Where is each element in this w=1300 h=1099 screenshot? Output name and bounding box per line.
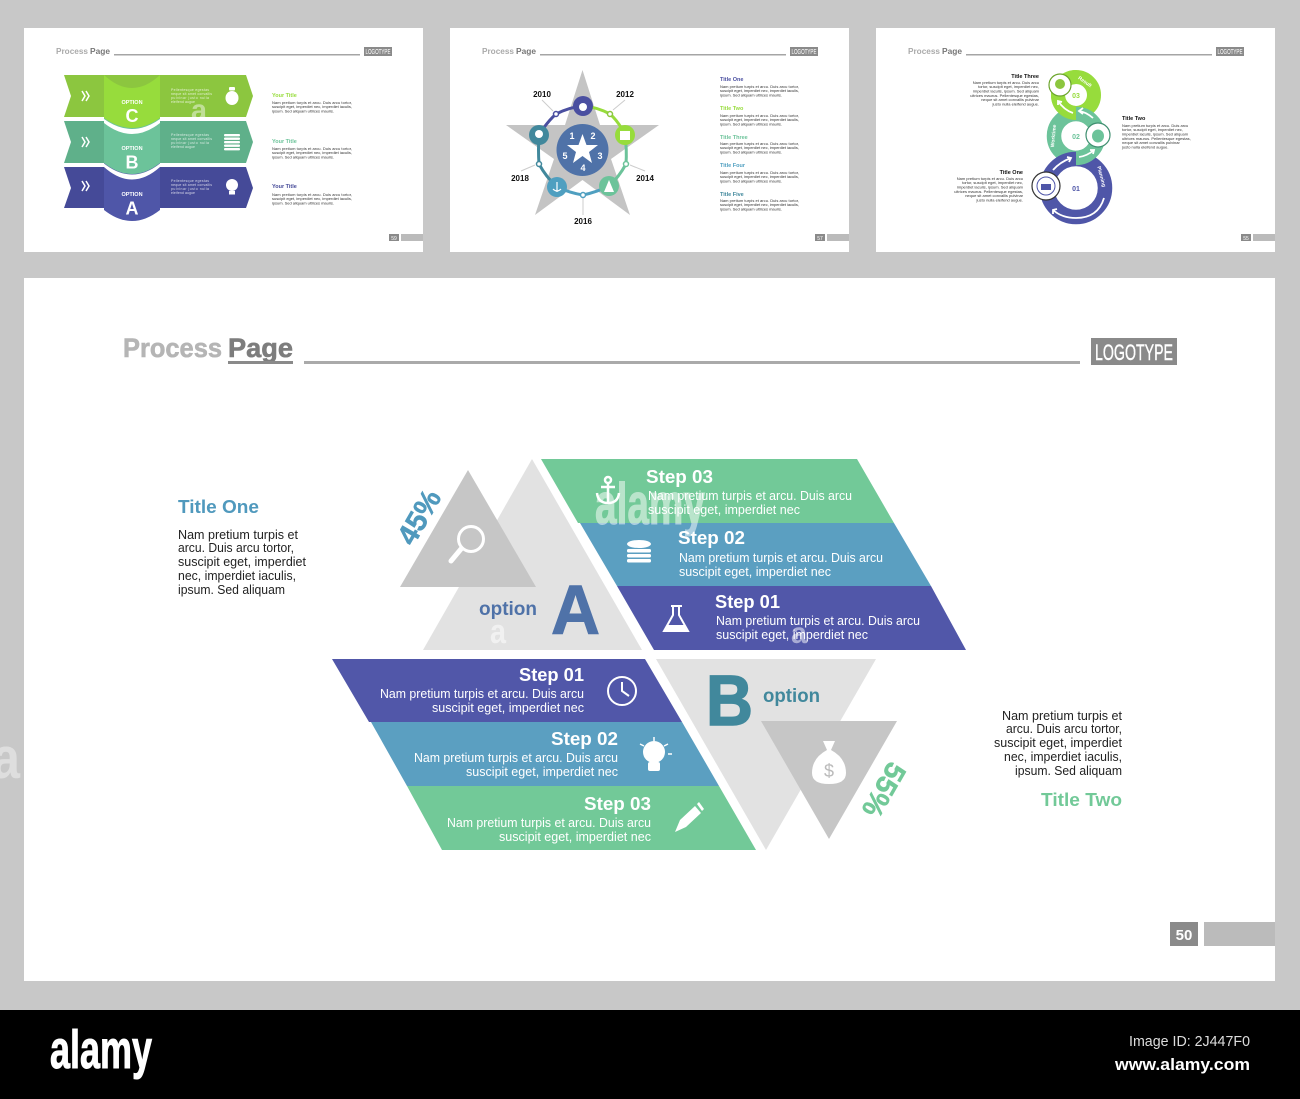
title text blocks: Nam pretium turpis et arcu. Duis arcu tortor, <box>720 141 799 146</box>
triangle 45% <box>400 470 536 587</box>
thumbnail page number: 57 <box>817 236 823 242</box>
step 01 upper: Nam pretium turpis et arcu. Duis arcu <box>716 613 920 628</box>
title text blocks: suscipit eget, imperdiet nec, imperdiet iaculis, <box>720 145 799 150</box>
title text blocks: ipsum. Sed aliquam ultrices mauris. <box>720 206 782 212</box>
thumbnail texts: suscipit eget, imperdiet nec, imperdiet iaculis, <box>272 104 352 109</box>
cylinder labels: A <box>126 198 138 218</box>
interlocked rings <box>1047 77 1105 217</box>
option A label: option <box>479 599 537 620</box>
step 03 upper: suscipit eget, imperdiet nec <box>648 502 800 517</box>
step 01 lower: Step 01 <box>519 665 584 685</box>
title text blocks: imperdiet iaculis, ipsum. Sed aliquam <box>973 88 1040 94</box>
thumbnail header <box>56 47 392 56</box>
step 03 lower: Step 03 <box>584 794 651 814</box>
thumbnail texts: ipsum. Sed aliquam ultrices mauris. <box>272 154 334 160</box>
step 02 lower: Nam pretium turpis et arcu. Duis arcu <box>414 750 618 765</box>
ring segments <box>538 106 626 195</box>
cylinder labels: C <box>126 106 138 126</box>
thumbnail header: Process <box>908 47 941 56</box>
star <box>506 70 659 215</box>
band captions: pulvinar justo nulla <box>171 141 209 145</box>
ring labels: 03 <box>1072 93 1080 100</box>
band captions: Pellentesque egestas <box>171 133 209 137</box>
option B label: B <box>706 662 753 741</box>
title text blocks: Title Five <box>720 192 744 198</box>
title text blocks: imperdiet iaculis, ipsum. Sed aliquam <box>957 184 1024 190</box>
ring labels: 01 <box>1072 186 1080 193</box>
option A label: A <box>551 571 600 649</box>
thumbnail header <box>482 47 818 56</box>
ring arrows <box>1053 101 1104 218</box>
logotype: LOGOTYPE <box>1095 340 1173 365</box>
text block: title two: arcu. Duis arcu tortor, <box>1006 721 1122 736</box>
thumbnail texts: Nam pretium turpis et arcu. Duis arcu tortor, <box>272 100 352 105</box>
option B label: option <box>763 686 820 707</box>
logotype <box>1091 338 1177 365</box>
year labels: 2014 <box>636 174 654 183</box>
step 03 lower: Nam pretium turpis et arcu. Duis arcu <box>447 815 651 830</box>
heading: Page <box>228 333 293 363</box>
thumbnail header: Page <box>942 47 963 56</box>
thumbnail texts: ipsum. Sed aliquam ultrices mauris. <box>272 108 334 114</box>
title text blocks: Nam pretium turpis et arcu. Duis arcu tortor, <box>720 198 799 203</box>
step 01 lower: Nam pretium turpis et arcu. Duis arcu <box>380 686 584 701</box>
text block: title two: Title Two <box>1041 790 1122 810</box>
year labels <box>511 90 654 226</box>
icon: money bag <box>812 741 846 784</box>
text block: title one: suscipit eget, imperdiet <box>178 554 306 569</box>
band captions: Pellentesque egestas <box>171 179 209 183</box>
text block: title one: nec, imperdiet iaculis, <box>178 568 296 583</box>
title text blocks: Title Three <box>720 135 748 141</box>
title text blocks: Title Three <box>1011 74 1039 80</box>
title text blocks: suscipit eget, imperdiet nec, imperdiet iaculis, <box>720 117 799 122</box>
panel: main slide <box>24 278 1275 981</box>
option A label <box>479 571 600 649</box>
title two block: imperdiet iaculis, ipsum. Sed aliquam <box>1122 132 1189 136</box>
text block: title one: ipsum. Sed aliquam <box>178 582 285 597</box>
title text blocks: ipsum. Sed aliquam ultrices mauris. <box>720 92 782 98</box>
thumbnail texts: Your Title <box>272 184 297 190</box>
thumbnail texts: suscipit eget, imperdiet nec, imperdiet iaculis, <box>272 150 352 155</box>
centre circle: 2 <box>590 131 596 141</box>
triangle B <box>656 659 876 850</box>
step 01 lower <box>332 659 682 722</box>
title text blocks: suscipit eget, imperdiet nec, imperdiet iaculis, <box>720 202 799 207</box>
band captions: eleifend augue <box>171 145 195 149</box>
text block: title two: Nam pretium turpis et <box>1002 708 1122 723</box>
page number <box>1170 922 1275 946</box>
year labels: 2012 <box>616 90 634 99</box>
step 03 upper <box>541 459 894 523</box>
thumbnail header <box>908 47 1244 56</box>
gap C-B <box>104 119 160 134</box>
icon: money bag <box>226 87 238 105</box>
icon: anchor <box>597 477 619 503</box>
chevrons <box>82 91 89 191</box>
title two block: justo nulla eleifend augue. <box>1121 144 1168 150</box>
footer band: alamy <box>50 1020 152 1080</box>
title two block: Title Two <box>1122 116 1146 122</box>
title text blocks: Title Four <box>720 163 746 169</box>
thumbnail header: LOGOTYPE <box>1218 49 1243 56</box>
year labels: 2010 <box>533 90 551 99</box>
title text blocks: Nam pretium turpis et arcu. Duis arcu tortor, <box>720 84 799 89</box>
step 02 lower <box>371 722 719 786</box>
text block: title one: arcu. Duis arcu tortor, <box>178 540 294 555</box>
icon: coins <box>627 540 651 562</box>
title two block <box>1121 116 1191 150</box>
watermark a: a <box>791 617 807 650</box>
text block: title two: suscipit eget, imperdiet <box>994 735 1122 750</box>
step 01 lower: suscipit eget, imperdiet nec <box>432 700 584 715</box>
thumbnail page number: 55 <box>1243 236 1249 242</box>
centre circle: 3 <box>597 151 603 161</box>
thumbnail header: Page <box>90 47 111 56</box>
text block: title one: Title One <box>178 497 259 517</box>
watermark a: a <box>490 613 507 651</box>
55 percent: 55% <box>855 756 911 823</box>
title text blocks: justo nulla eleifend augue. <box>992 102 1039 106</box>
step 01 upper: suscipit eget, imperdiet nec <box>716 627 868 642</box>
band captions: eleifend augue <box>171 100 195 104</box>
thumbnail texts: Nam pretium turpis et arcu. Duis arcu tortor, <box>272 146 352 151</box>
45 percent: 45% <box>392 484 448 551</box>
thumbnail texts: Your Title <box>272 93 297 99</box>
title text blocks: ipsum. Sed aliquam ultrices mauris. <box>720 178 782 184</box>
band captions: pulvinar justo nulla <box>171 96 209 100</box>
cylinder labels: OPTION <box>121 192 143 198</box>
ring nodes <box>529 96 635 198</box>
band C <box>64 75 253 117</box>
year labels: 2016 <box>574 217 592 226</box>
panel: thumbnail slide options ABC <box>24 28 423 252</box>
band captions: eleifend augue <box>171 191 195 195</box>
watermark a: a <box>191 94 207 127</box>
title text blocks: Nam pretium turpis et arcu. Duis arcu <box>973 80 1039 85</box>
cylinder labels <box>121 100 143 218</box>
title text blocks: ultrices maurus. Pellentesque egestas, <box>954 189 1023 194</box>
band captions: neque sit amet convallis <box>171 137 212 141</box>
title text blocks: Title One <box>720 77 743 83</box>
step 02 upper: Step 02 <box>678 528 745 548</box>
band captions: neque sit amet convallis <box>171 92 212 96</box>
centre circle: 4 <box>580 163 586 173</box>
text block: title two: nec, imperdiet iaculis, <box>1004 749 1122 764</box>
title two block: ultrices maurus. Pellentesque egestas, <box>1122 136 1191 141</box>
title two block: Nam pretium turpis et arcu. Duis arcu <box>1122 123 1188 128</box>
ring labels: Result <box>1077 75 1093 89</box>
title text blocks: ipsum. Sed aliquam ultrices mauris. <box>720 150 782 154</box>
centre circle: 1 <box>569 131 575 141</box>
thumbnail texts: Nam pretium turpis et arcu. Duis arcu tortor, <box>272 192 352 197</box>
icon: light bulb <box>226 179 238 194</box>
watermark: alamy <box>595 472 705 537</box>
year connector lines <box>521 100 645 215</box>
ring labels: Planning <box>1095 166 1107 188</box>
step 03 upper: Step 03 <box>646 467 713 487</box>
icon: money bag: $ <box>824 761 834 781</box>
panel: thumbnail slide star <box>450 28 849 252</box>
thumbnail page number <box>1241 234 1275 242</box>
thumbnail page number <box>389 234 423 242</box>
icon: pencil <box>675 802 704 832</box>
cylinder labels: B <box>126 152 138 172</box>
step 01 upper <box>617 586 966 650</box>
title text blocks: ultrices maurus. Pellentesque egestas, <box>970 93 1039 98</box>
ring labels: 02 <box>1072 134 1080 141</box>
cylinder B <box>104 118 160 174</box>
thumbnail header: Process <box>56 47 89 56</box>
title text blocks <box>954 74 1040 202</box>
title text blocks: ipsum. Sed aliquam ultrices mauris. <box>720 122 782 126</box>
title text blocks: suscipit eget, imperdiet nec, imperdiet iaculis, <box>720 88 799 93</box>
text block: title one <box>178 497 306 597</box>
title text blocks: neque sit amet convallis pulvinar <box>965 193 1024 198</box>
year labels: 2018 <box>511 174 529 183</box>
option B label <box>706 662 820 741</box>
step 03 lower <box>407 786 756 850</box>
icon: clock <box>608 677 636 705</box>
title text blocks: tortor, suscipit eget, imperdiet nec, <box>962 180 1023 185</box>
title text blocks: Title One <box>1000 170 1023 176</box>
thumbnail page number <box>815 234 849 242</box>
triangle 55% <box>761 721 897 839</box>
thumbnail texts: ipsum. Sed aliquam ultrices mauris. <box>272 200 334 206</box>
step 02 upper: suscipit eget, imperdiet nec <box>679 564 831 579</box>
centre circle <box>556 124 608 176</box>
title text blocks: tortor, suscipit eget, imperdiet nec, <box>978 84 1039 89</box>
step 02 lower: suscipit eget, imperdiet nec <box>466 764 618 779</box>
page number: 50 <box>1176 927 1192 944</box>
icon badges <box>1032 74 1110 200</box>
footer band: www.alamy.com <box>1114 1055 1250 1074</box>
band A <box>64 167 253 208</box>
title text blocks: Nam pretium turpis et arcu. Duis arcu <box>957 176 1023 181</box>
title text blocks: Nam pretium turpis et arcu. Duis arcu tortor, <box>720 170 799 175</box>
text block: title one: Nam pretium turpis et <box>178 527 298 542</box>
thumbnail header: Page <box>516 47 537 56</box>
band captions: Pellentesque egestas <box>171 88 209 92</box>
cylinder labels: OPTION <box>121 146 143 152</box>
title text blocks: Nam pretium turpis et arcu. Duis arcu tortor, <box>720 113 799 118</box>
band B <box>64 121 253 163</box>
title two block: tortor, suscipit eget, imperdiet nec, <box>1122 127 1183 132</box>
panel: thumbnail slide circles <box>876 28 1275 252</box>
thumbnail texts: Your Title <box>272 139 297 145</box>
step 02 upper: Nam pretium turpis et arcu. Duis arcu <box>679 550 883 565</box>
thumbnail header: Process <box>482 47 515 56</box>
cylinder C <box>104 75 160 128</box>
centre circle: 5 <box>562 151 568 161</box>
icon: coins <box>224 134 240 150</box>
thumbnail page number: 59 <box>391 236 397 242</box>
step 01 upper: Step 01 <box>715 592 780 612</box>
thumbnail texts: suscipit eget, imperdiet nec, imperdiet iaculis, <box>272 196 352 201</box>
step 03 upper: Nam pretium turpis et arcu. Duis arcu <box>648 488 852 503</box>
ring labels: Worktime <box>1050 124 1058 147</box>
text block: title two: ipsum. Sed aliquam <box>1015 763 1122 778</box>
footer band <box>0 1010 1300 1099</box>
icon: light bulb <box>640 737 672 771</box>
thumbnail header: LOGOTYPE <box>792 49 817 56</box>
title text blocks: Title Two <box>720 106 744 112</box>
title two block: neque sit amet convallis pulvinar <box>1122 140 1180 145</box>
title text blocks <box>720 77 799 212</box>
thumbnail texts <box>272 93 352 206</box>
ring labels <box>1050 75 1107 193</box>
icon: magnifier <box>451 526 484 561</box>
title text blocks: neque sit amet convallis pulvinar <box>981 97 1040 102</box>
title text blocks: suscipit eget, imperdiet nec, imperdiet iaculis, <box>720 174 799 179</box>
thumbnail header: LOGOTYPE <box>366 49 391 56</box>
step 02 upper <box>580 523 931 586</box>
band captions: neque sit amet convallis <box>171 183 212 187</box>
band captions <box>171 88 212 195</box>
gap B-A <box>104 164 160 180</box>
cylinder labels: OPTION <box>121 100 143 106</box>
heading <box>123 333 1080 364</box>
step 03 lower: suscipit eget, imperdiet nec <box>499 829 651 844</box>
text block: title two <box>994 708 1122 810</box>
triangle A <box>423 459 642 650</box>
band captions: pulvinar justo nulla <box>171 187 209 191</box>
footer band: Image ID: 2J447F0 <box>1129 1033 1250 1050</box>
title text blocks: justo nulla eleifend augue. <box>976 198 1023 202</box>
step 02 lower: Step 02 <box>551 729 618 749</box>
heading: Process <box>123 333 222 363</box>
cylinder A <box>104 160 160 221</box>
icon: flask <box>664 606 688 631</box>
